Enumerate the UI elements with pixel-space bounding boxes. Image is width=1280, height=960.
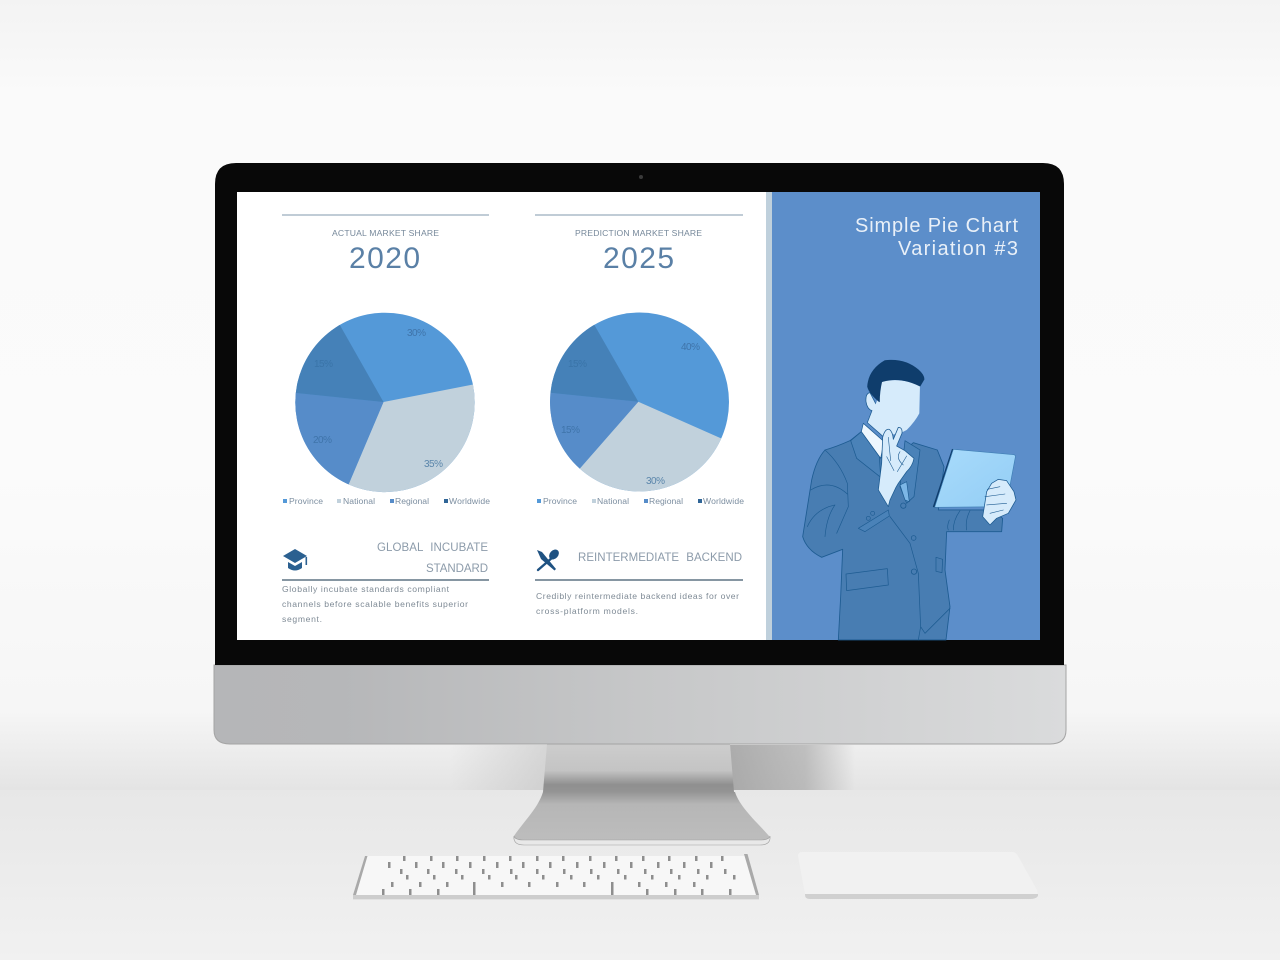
pie chart 2020: [295, 312, 475, 492]
right hand: [983, 479, 1016, 525]
lapels: [851, 432, 881, 477]
legend 2025: Province: [543, 496, 577, 506]
sleeve creases: [807, 450, 970, 537]
legend 2020: [283, 496, 490, 506]
legend 2025: National: [597, 496, 629, 506]
illustration: businessman with tablet: [803, 360, 1016, 640]
ear and neck: [866, 393, 907, 437]
legend 2025: [537, 496, 744, 506]
text block: reintermediate backend: cross-platform models.: [536, 606, 638, 616]
icon: spoon and knife: [537, 548, 561, 570]
panel: 2020 header: 2020: [349, 242, 420, 275]
panel: 2025 header: 2025: [603, 242, 674, 275]
legend 2020: National: [343, 496, 375, 506]
keyboard: [353, 854, 759, 900]
left hand: [878, 427, 914, 507]
icon: graduation cap: [283, 549, 307, 570]
monitor chin: [214, 665, 1066, 744]
suit body: [803, 432, 1003, 640]
heading: reintermediate backend: REINTERMEDIATE BACKEND: [578, 552, 742, 564]
monitor body: [214, 163, 1066, 744]
legend 2025: Regional: [649, 496, 683, 506]
monitor stand: [514, 744, 770, 845]
coat buttons: [901, 503, 917, 574]
pie chart 2025: 15%: [568, 359, 587, 370]
title: Variation #3: [898, 238, 1018, 260]
suit pocket: [846, 569, 888, 591]
cuff details and buttons: [858, 510, 889, 532]
panel: 2020 header: [282, 215, 489, 275]
pie chart 2020: 20%: [313, 435, 332, 446]
text block: global incubate: channels before scalable benefits superior: [282, 599, 468, 609]
text block: global incubate: segment.: [282, 614, 322, 624]
tablet: [933, 449, 954, 507]
legend 2020: Worldwide: [449, 496, 490, 506]
right hand finger lines: [985, 487, 1007, 513]
text block: global incubate: [282, 580, 489, 624]
legend 2020: Regional: [395, 496, 429, 506]
pie chart 2020: 15%: [314, 359, 333, 370]
text block: reintermediate backend: Credibly reintermediate backend ideas for over: [536, 591, 739, 601]
small pocket and front seam: [890, 517, 950, 640]
left hand finger lines: [887, 437, 907, 472]
camera: [639, 175, 643, 179]
pie chart 2025: 30%: [646, 476, 665, 487]
shirt collar: [861, 423, 884, 458]
legend 2025: Worldwide: [703, 496, 744, 506]
hair: [868, 360, 924, 402]
panel: 2025 header: [535, 215, 743, 275]
face: [873, 380, 920, 436]
pie chart 2025: [550, 312, 729, 492]
heading: global incubate standard: [377, 542, 488, 575]
text block: global incubate: Globally incubate standards compliant: [282, 584, 450, 594]
title: Simple Pie Chart: [855, 215, 1018, 237]
pie chart 2025: 15%: [561, 425, 580, 436]
tie: [900, 482, 909, 502]
legend 2020: Province: [289, 496, 323, 506]
heading: global incubate standard: GLOBAL INCUBATE: [377, 542, 488, 554]
heading: global incubate standard: STANDARD: [426, 563, 488, 575]
panel: 2025 header: PREDICTION MARKET SHARE: [575, 228, 702, 238]
pie chart 2025: 40%: [681, 342, 700, 353]
title: [855, 215, 1018, 260]
pie chart 2020: 30%: [407, 328, 426, 339]
text block: reintermediate backend: [535, 580, 743, 616]
panel: 2020 header: ACTUAL MARKET SHARE: [332, 228, 439, 238]
pie chart 2020: 35%: [424, 459, 443, 470]
monitor bezel: [215, 163, 1064, 665]
slide screen: [237, 192, 1040, 640]
trackpad: [798, 852, 1038, 899]
